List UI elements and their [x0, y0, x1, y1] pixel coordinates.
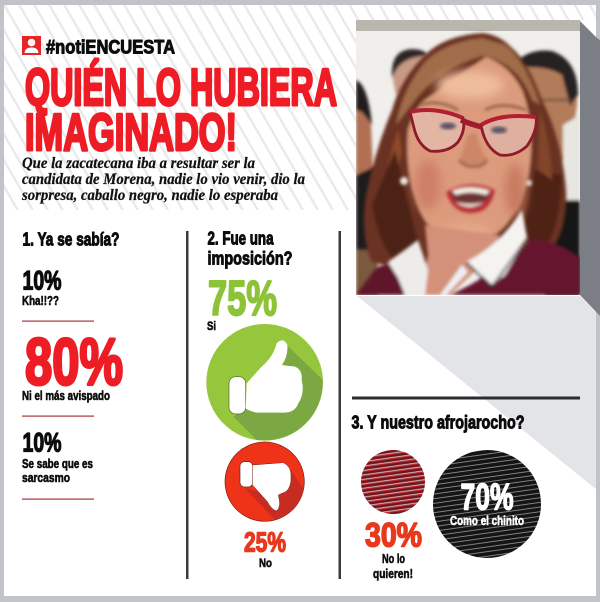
white shirt and dark coat — [563, 115, 580, 200]
photo: smiling woman with red glasses — [356, 20, 580, 295]
result: 30% no lo quieren: quieren! — [373, 566, 413, 581]
result: 30% no lo quieren: No lo — [382, 551, 405, 566]
face — [407, 57, 531, 245]
label: Si: Si — [207, 319, 216, 333]
earrings — [400, 177, 408, 185]
result: 70% como el chinito — [450, 476, 524, 528]
photo side shadow — [580, 5, 600, 316]
glasses — [410, 110, 536, 155]
result: 10% sarcasmo: sarcasmo — [22, 470, 70, 485]
result: 70% como el chinito: 70% — [460, 476, 514, 518]
vertical divider left — [186, 231, 188, 579]
background man, centre — [393, 50, 428, 95]
subtitle: candidata de Morena, nadie lo vio venir, dio la — [22, 171, 305, 188]
background man, right — [525, 65, 580, 162]
eyebrows — [420, 103, 458, 110]
title: QUIÉN LO HUBIERA — [25, 59, 337, 117]
result: 80% — [22, 324, 123, 403]
icon: thumbs down — [225, 442, 308, 521]
background man, left — [356, 108, 375, 177]
result: 80%: Ni el más avispado — [22, 388, 110, 403]
result: 10% sarcasmo: Se sabe que es — [22, 456, 93, 471]
hashtag text: #notiENCUESTA — [46, 38, 175, 58]
result: 10% sarcasmo: 10% — [22, 428, 62, 458]
result: 30% no lo quieren — [365, 516, 422, 581]
result: 80%: 80% — [25, 324, 123, 398]
question 1 heading: 1. Ya se sabía? — [22, 228, 120, 250]
question 3 heading: 3. Y nuestro afrojarocho? — [352, 412, 524, 432]
label: No: No — [259, 556, 272, 570]
striped circle 70% — [433, 450, 541, 558]
result: 30% no lo quieren: 30% — [365, 516, 422, 554]
result: 10% Kha: 10% — [22, 266, 62, 296]
hair — [364, 33, 566, 275]
panel: question 2 — [206, 228, 327, 570]
question 2 heading: 2. Fue una — [208, 228, 274, 248]
jacket — [356, 262, 406, 295]
result: 25%: 25% — [244, 526, 286, 558]
face shading — [415, 71, 525, 240]
result: 10% Kha — [22, 266, 62, 308]
result: 10% sarcasmo — [22, 428, 93, 485]
icon: thumbs up — [206, 324, 323, 441]
result: 10% Kha: Kha!!?? — [22, 293, 59, 308]
result: 75%: 75% — [208, 272, 277, 326]
icon: person — [22, 36, 41, 55]
mouth — [446, 184, 495, 213]
title — [25, 59, 337, 162]
panel: question 3 — [352, 412, 541, 581]
divider above question 3 — [352, 396, 580, 400]
title: IMAGINADO! — [25, 104, 237, 162]
neck and chest — [420, 225, 500, 295]
striped circle 30% — [361, 450, 425, 514]
subtitle: sorpresa, caballo negro, nadie lo esperaba — [21, 187, 278, 204]
question 2 heading: imposición? — [208, 248, 292, 268]
vertical divider right — [338, 231, 341, 579]
subtitle — [21, 155, 305, 204]
subtitle: Que la zacatecana iba a resultar ser la — [22, 155, 255, 172]
header tag — [22, 36, 175, 58]
hatched header background — [4, 5, 596, 210]
collar — [388, 240, 428, 295]
nose — [460, 132, 486, 165]
panel: question 1 — [22, 228, 123, 500]
question 2 heading — [208, 228, 292, 268]
cast shadow — [357, 296, 597, 490]
result: 70% como el chinito: Como el chinito — [450, 513, 524, 528]
